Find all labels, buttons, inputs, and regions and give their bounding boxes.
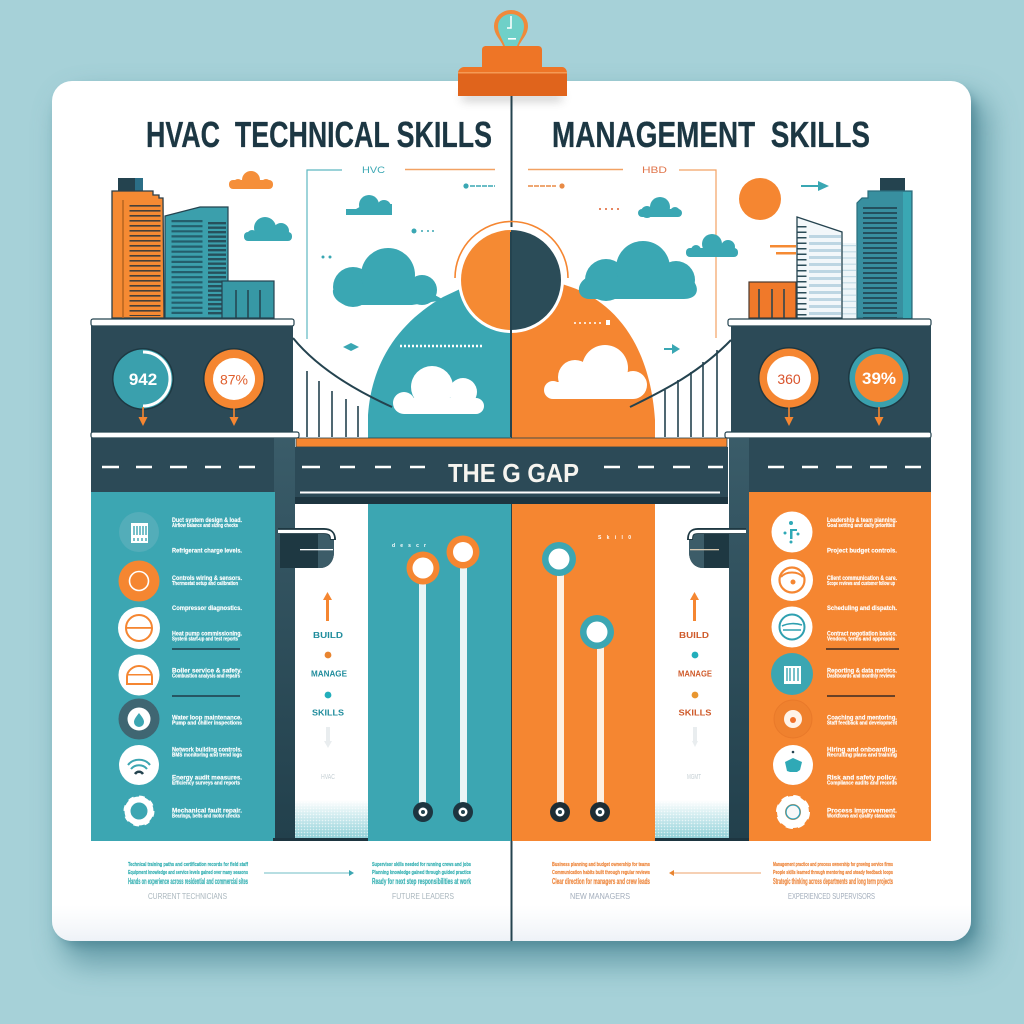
skill text rows: Duct system design & load. [172, 517, 242, 524]
icon: gear [125, 797, 153, 825]
skill text rows: Scheduling and dispatch. [827, 605, 897, 612]
building: white glass tower [797, 217, 856, 318]
panel: right skills list [749, 492, 931, 841]
card shadow [58, 90, 988, 964]
panel: right center orange [512, 504, 655, 841]
skill text rows [827, 517, 897, 820]
arrow: teal top right [801, 181, 829, 191]
footer caption: NEW MANAGERS [570, 891, 630, 901]
tower: ledge [91, 432, 299, 438]
panel: left center teal [368, 504, 511, 841]
skill text rows: Mechanical fault repair. [172, 808, 242, 814]
icon: heart badge [774, 700, 812, 738]
skill text rows: Project budget controls. [827, 548, 897, 554]
label: manage: MANAGE [311, 670, 348, 678]
stat: 942 gauge: 942 [129, 370, 157, 389]
clip: orange mount with bulb [458, 10, 567, 100]
heading: the gap: THE G GAP [448, 458, 579, 488]
tower: ledge [725, 432, 931, 438]
building: teal tower [165, 207, 228, 318]
slider base 2 [590, 802, 610, 822]
slider base 1 [550, 802, 570, 822]
footer: right source block: Clear direction for managers and crew leads [552, 877, 650, 886]
dot: teal [325, 692, 331, 698]
footer: left target block: Planning knowledge gained through guided practice [372, 870, 471, 876]
dot: teal [692, 652, 698, 658]
slider track 1 [557, 570, 564, 805]
footer caption: FUTURE LEADERS [392, 891, 454, 901]
stat: 360 gauge: 360 [777, 371, 801, 387]
tower: body [91, 326, 293, 432]
title: HVAC technical skills: HVAC TECHNICAL SKILLS [146, 114, 492, 155]
icon: barcode [771, 653, 813, 695]
skill text rows: Boiler service & safety. [172, 668, 242, 674]
cloud: large teal right [579, 241, 697, 301]
bracket and label: right HBD [528, 165, 716, 338]
icon: teal ring [772, 606, 812, 648]
skill text rows: Compliance audits and records [827, 780, 897, 786]
bridge: dashes [302, 466, 723, 468]
bracket and label: right HBD: HBD [642, 165, 668, 175]
footer caption: CURRENT TECHNICIANS [148, 891, 227, 901]
skill text rows: Risk and safety policy. [827, 774, 897, 782]
skill text rows: Client communication & care. [827, 575, 897, 582]
cloud: small orange [229, 171, 273, 189]
cloud: large teal left [333, 248, 444, 307]
stat: 39% gauge [848, 347, 910, 426]
label: skills: SKILLS [312, 708, 345, 718]
skill text rows: Workflows and quality standards [827, 814, 895, 820]
footer: right source block: Communication habits built through regular reviews [552, 870, 650, 876]
skill text rows: Hiring and onboarding. [827, 746, 897, 754]
icon: orange ring [118, 560, 160, 602]
skill text rows: Bearings, belts and motor checks [172, 814, 240, 820]
slider base 2 [453, 802, 473, 822]
footer: left target block [372, 862, 471, 901]
slider base 1 [413, 802, 433, 822]
skill text rows: Coaching and mentoring. [827, 714, 897, 722]
road: left dashes [102, 466, 255, 468]
icon: light bulb [494, 10, 528, 46]
bracket and label: left HVC [307, 165, 495, 339]
skill text rows: Dashboards and monthly reviews [827, 674, 895, 680]
slider knob 1 [542, 542, 576, 576]
clamp: left [278, 530, 334, 568]
footer: left source block: Technical training paths and certification records for field staff [128, 862, 248, 868]
arch: left teal hill [368, 265, 511, 441]
cloud: small teal 3 [638, 197, 682, 218]
building: low orange block [749, 282, 796, 318]
arrow: footer left [669, 870, 761, 876]
skill text rows: Goal setting and daily priorities [827, 523, 895, 529]
skill text rows: Pump and chiller inspections [172, 720, 242, 726]
footer: right target block: Strategic thinking across departments and long term projects [773, 877, 893, 886]
road: right dashes [768, 466, 921, 468]
dot: orange [325, 652, 331, 658]
skill text rows: Heat pump commissioning. [172, 630, 242, 638]
skill text rows: Thermostat setup and calibration [172, 581, 238, 587]
skill text rows: Combustion analysis and repairs [172, 674, 240, 680]
building: teal tower [857, 178, 912, 318]
slider: right pair [542, 535, 631, 822]
panel: left skills list [91, 492, 275, 841]
panel edge below columns [273, 838, 749, 841]
stat: 39% gauge: 39% [862, 369, 896, 388]
icon: gear [778, 797, 808, 827]
bridge: road band [295, 447, 728, 504]
icon: teal dots figure [772, 512, 812, 552]
skill text rows: Network building controls. [172, 746, 242, 754]
skill text rows: Reporting & data metrics. [827, 668, 897, 674]
icon: water drop [118, 698, 160, 740]
building: orange accent lines [770, 245, 796, 254]
title: management skills: MANAGEMENT SKILLS [552, 114, 870, 155]
cloud: small teal 4 [686, 234, 738, 257]
slider caption: S k i l 0 [598, 535, 631, 541]
suspension cable: right [630, 340, 731, 437]
label: faint: MGMT [687, 774, 701, 781]
slider knob 2 [446, 536, 480, 568]
label: skills: SKILLS [678, 708, 712, 718]
footer: left source block: Equipment knowledge and service levels gained over many seasons [128, 870, 248, 876]
footer: left source block [128, 862, 248, 901]
sun: split circle [455, 222, 568, 437]
skill text rows: Water loop maintenance. [172, 714, 242, 722]
road: right [749, 438, 931, 492]
panel: left center white strip [295, 504, 368, 840]
building: low teal block [222, 281, 274, 318]
column: right [729, 438, 749, 841]
skill text rows: Leadership & team planning. [827, 517, 897, 524]
slider knob 1 [406, 552, 440, 584]
small marks around clouds [322, 208, 680, 354]
skill text rows: Energy audit measures. [172, 774, 242, 782]
skill text rows: Staff feedback and development [827, 720, 897, 726]
footer: left target block: Supervisor skills needed for running crews and jobs [372, 862, 471, 868]
skill text rows: System start-up and test reports [172, 636, 238, 642]
arrow: faint down [324, 727, 332, 748]
slider knob 2 [580, 615, 614, 649]
stat: 87% gauge [203, 348, 265, 426]
arrow: faint down [692, 727, 698, 747]
right tower [725, 319, 931, 841]
skill text rows: Airflow balance and sizing checks [172, 523, 238, 529]
left skyline [112, 178, 274, 318]
building: orange tower [112, 178, 164, 318]
skill text rows: Process improvement. [827, 808, 897, 814]
slider track 2 [460, 565, 467, 805]
stat: 87% gauge: 87% [220, 372, 248, 388]
bridge [295, 438, 728, 504]
tower: body [731, 326, 931, 432]
label: manage: MANAGE [678, 670, 713, 678]
icon: orange dome [118, 654, 160, 696]
skill text rows: Recruiting plans and training [827, 752, 897, 758]
cloud: small teal 2 [346, 195, 392, 215]
arch: right orange hill [512, 265, 655, 441]
cloud: small teal 1 [244, 217, 292, 241]
cloud: white right [544, 345, 647, 399]
cloud: white left [393, 366, 484, 414]
footer: left source block: Hands on experience across residential and commercial sites [128, 877, 248, 886]
stat: 360 gauge [758, 347, 820, 426]
skill text rows: Scope reviews and customer follow up [827, 581, 895, 587]
sun: orange small [739, 178, 781, 220]
footer: right source block [552, 862, 650, 901]
footer: right target block [773, 862, 893, 901]
tower: roof [91, 319, 294, 326]
label: build: BUILD [313, 631, 343, 640]
column: left [274, 438, 295, 841]
skill text rows: Vendors, terms and approvals [827, 636, 895, 642]
footer: right target block: People skills learned through mentoring and steady feedback loops [773, 870, 893, 876]
dither: fade bottom [655, 800, 729, 838]
icon: teal house [773, 745, 813, 785]
card [52, 81, 971, 941]
tower: roof [728, 319, 931, 326]
icon: barcode [119, 512, 159, 552]
clip body [458, 46, 567, 96]
arrow: up orange [323, 592, 332, 621]
dot: orange [692, 692, 698, 698]
arrow: footer right [264, 870, 354, 876]
bracket and label: left HVC: HVC [362, 165, 386, 175]
suspension cable: left [293, 338, 392, 437]
icon: wifi [119, 745, 159, 785]
label: faint: HVAC [321, 774, 335, 781]
skill text rows: Controls wiring & sensors. [172, 575, 242, 582]
slider: left pair [392, 536, 480, 822]
stat: 942 gauge [112, 348, 174, 426]
skill text rows: Efficiency surveys and reports [172, 780, 240, 786]
skill text rows: Compressor diagnostics. [172, 605, 242, 612]
center divider [510, 92, 512, 941]
left tower [91, 319, 299, 841]
skill text rows: BMS monitoring and trend logs [172, 752, 242, 758]
icon: orange minus ring [118, 607, 160, 649]
slider track 1 [419, 580, 426, 805]
skill text rows: Refrigerant charge levels. [172, 548, 242, 554]
footer: right target block: Management practice and process ownership for growing service firms [773, 862, 893, 868]
panel: right center white strip [655, 504, 729, 840]
slider caption: d e s c r [392, 543, 426, 549]
label: build: BUILD [679, 631, 709, 640]
arrow: up orange [690, 592, 699, 621]
bridge: lower white line [300, 492, 720, 494]
footer: right source block: Business planning and budget ownership for teams [552, 862, 650, 868]
skill text rows [172, 517, 242, 820]
clip shadow [462, 94, 562, 100]
icon: orange eye [771, 559, 813, 601]
footer: left target block: Ready for next step responsibilities at work [372, 877, 471, 886]
slider track 2 [597, 640, 604, 805]
bridge: orange deck [296, 438, 727, 447]
footer caption: EXPERIENCED SUPERVISORS [788, 891, 875, 901]
skill text rows: Contract negotiation basics. [827, 630, 897, 638]
dither: fade bottom [295, 800, 368, 838]
clamp: right [689, 530, 746, 568]
road: left [91, 438, 274, 492]
right skyline [749, 178, 912, 318]
